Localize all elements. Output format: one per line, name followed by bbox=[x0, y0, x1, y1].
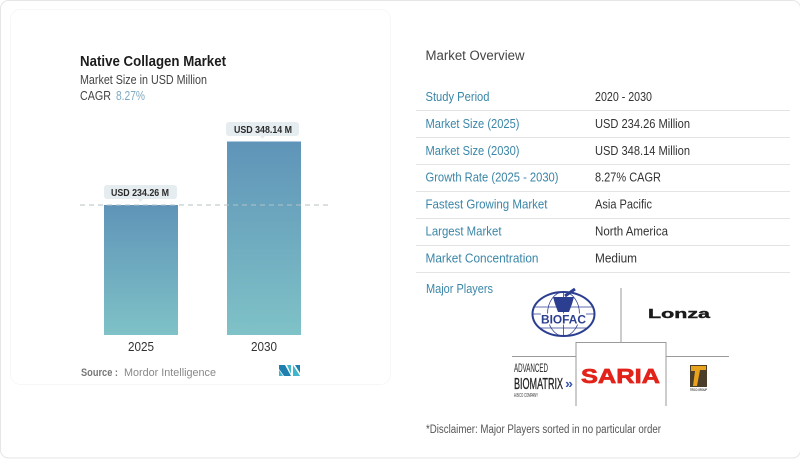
row: study period bbox=[426, 90, 652, 104]
disclaimer: *Disclaimer: Major Players sorted in no particular order bbox=[426, 424, 661, 436]
row: market size 2030 bbox=[426, 144, 690, 158]
bar chart bbox=[80, 122, 328, 354]
row: largest market: Largest Market bbox=[426, 224, 502, 238]
row: study period: Study Period bbox=[426, 90, 490, 104]
axis label: 2030: 2030 bbox=[251, 340, 277, 354]
logo: Advanced BioMatrix: » bbox=[565, 376, 573, 391]
bar: 2025 bbox=[104, 205, 178, 335]
CAGR label: CAGR bbox=[80, 89, 111, 103]
panel: market size chart bbox=[10, 10, 390, 384]
source line: Mordor Intelligence bbox=[124, 367, 216, 379]
panel: major players logos bbox=[512, 288, 729, 406]
logo: Advanced BioMatrix: BIOMATRIX bbox=[514, 376, 563, 393]
row: market concentration: Medium bbox=[595, 252, 637, 266]
heading: market overview: Market Overview bbox=[426, 48, 525, 63]
row: growth rate: Growth Rate (2025 - 2030) bbox=[426, 170, 558, 184]
logo: T emblem: TRICO GROUP bbox=[690, 388, 707, 392]
row: market size 2030: Market Size (2030) bbox=[426, 144, 520, 158]
row: fastest growing market bbox=[426, 198, 652, 212]
source line: Source : bbox=[81, 367, 118, 379]
callout: 2030 value: USD 348.14 M bbox=[234, 124, 292, 136]
chart subtitle: Market Size in USD Million bbox=[80, 73, 207, 87]
logo: Lonza: Lonza bbox=[648, 306, 711, 321]
table: market overview bbox=[416, 90, 790, 272]
logo: BIOFAC: BIOFAC bbox=[541, 314, 586, 326]
callout: 2025 value: USD 234.26 M bbox=[111, 187, 169, 199]
row: market size 2030: USD 348.14 Million bbox=[595, 144, 690, 158]
row: market size 2025 bbox=[426, 117, 690, 131]
axis label: 2025: 2025 bbox=[128, 340, 154, 354]
logo: BIOFAC bbox=[532, 289, 594, 336]
row: market concentration bbox=[426, 252, 637, 266]
source line bbox=[81, 367, 216, 379]
row: fastest growing market: Fastest Growing Market bbox=[426, 198, 548, 212]
chart title: Native Collagen Market bbox=[80, 54, 226, 70]
row: fastest growing market: Asia Pacific bbox=[595, 198, 652, 212]
CAGR label: 8.27% bbox=[116, 89, 145, 103]
logo: Advanced BioMatrix bbox=[514, 361, 573, 399]
row: market concentration: Market Concentration bbox=[426, 252, 539, 266]
logo: SARIA: SARIA bbox=[581, 366, 660, 388]
row: growth rate bbox=[426, 170, 661, 184]
callout: 2025 value bbox=[104, 185, 177, 202]
logo: Advanced BioMatrix: A BICO COMPANY bbox=[514, 393, 538, 399]
row: growth rate: 8.27% CAGR bbox=[595, 170, 661, 184]
logo: Advanced BioMatrix: ADVANCED bbox=[514, 361, 548, 375]
bar: 2030 bbox=[227, 142, 301, 335]
heading: major players: Major Players bbox=[426, 282, 493, 296]
icon: Mordor Intelligence logo bbox=[279, 365, 300, 376]
row: market size 2025: USD 234.26 Million bbox=[595, 117, 690, 131]
CAGR label bbox=[80, 89, 145, 103]
row: market size 2025: Market Size (2025) bbox=[426, 117, 520, 131]
row: largest market bbox=[426, 224, 668, 238]
row: largest market: North America bbox=[595, 224, 668, 238]
row: study period: 2020 - 2030 bbox=[595, 90, 652, 104]
logo: T emblem bbox=[690, 365, 707, 392]
callout: 2030 value bbox=[226, 122, 299, 139]
